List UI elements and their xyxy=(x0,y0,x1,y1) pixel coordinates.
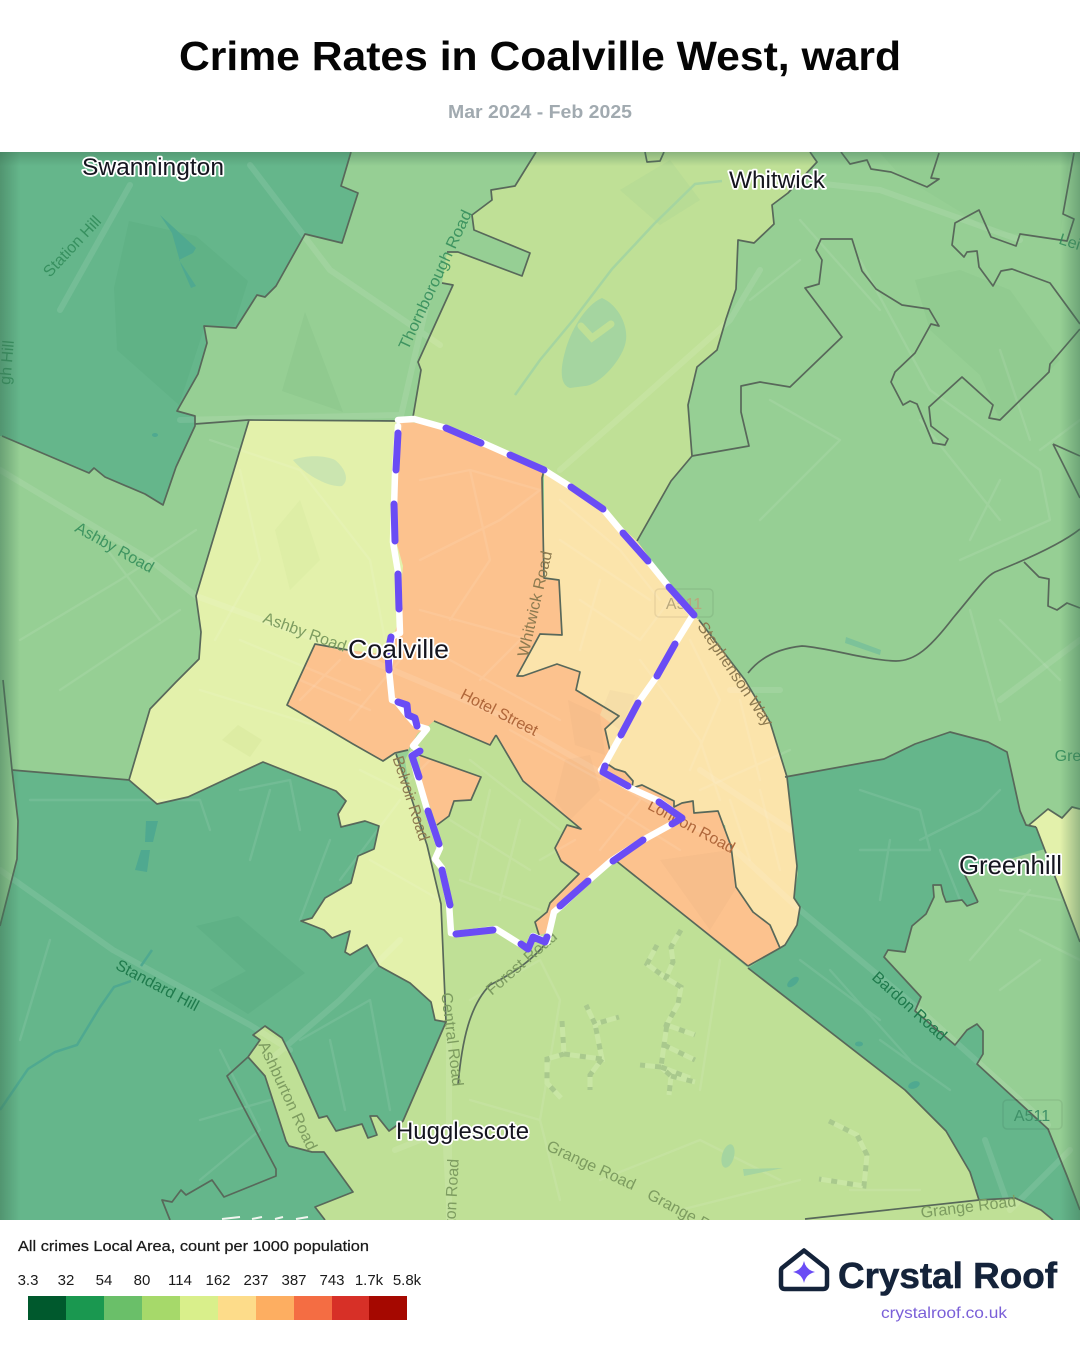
area: pale orange east ward xyxy=(517,470,800,948)
place labels xyxy=(82,154,1062,1145)
place labels: Whitwick xyxy=(729,167,826,194)
legend values xyxy=(18,1272,422,1289)
place labels: Greenhill xyxy=(959,850,1062,880)
legend values: 1.7k xyxy=(355,1272,384,1289)
road labels: Hotel Street xyxy=(458,686,541,740)
area: south-west dark green xyxy=(0,762,446,1220)
road labels: Belvoir Road xyxy=(389,754,432,843)
website link text: crystalroof.co.uk xyxy=(881,1305,1008,1322)
area: north light green xyxy=(398,152,817,541)
road shields A511: A511 xyxy=(1014,1108,1050,1125)
road labels: Ashburton Road xyxy=(254,1039,320,1153)
road labels: Forest Road xyxy=(483,928,561,999)
road labels: Stephenson Way xyxy=(694,619,776,730)
area: orange main ward xyxy=(287,420,780,966)
road labels: Station Hill xyxy=(40,213,105,281)
boundary lines xyxy=(0,152,1080,1220)
road labels: Hamilton Road xyxy=(440,1158,463,1265)
road labels: Grange Road xyxy=(920,1193,1017,1222)
dashed footpaths south xyxy=(547,930,867,1186)
place labels: Swannington xyxy=(82,154,224,181)
area: south light green xyxy=(248,721,1053,1220)
place labels: Coalville xyxy=(348,634,449,664)
logo: Crystal Roof xyxy=(781,1250,1058,1322)
area: south-east dark green xyxy=(748,732,1080,1220)
road labels: Ashby Road xyxy=(261,610,348,656)
road labels: Ashby Road xyxy=(72,519,156,577)
road labels: Standard Hill xyxy=(113,957,202,1015)
road labels: London Road xyxy=(645,797,738,857)
legend colour bar xyxy=(28,1296,407,1320)
lakes and ponds xyxy=(0,181,921,1176)
subtitle: date range: Mar 2024 - Feb 2025 xyxy=(448,102,632,122)
place labels: Hugglescote xyxy=(396,1118,529,1145)
legend xyxy=(18,1238,422,1320)
road labels: Grange Road xyxy=(644,1187,737,1247)
road labels xyxy=(0,208,1080,1265)
legend values: 743 xyxy=(319,1272,345,1289)
legend values: 237 xyxy=(243,1272,269,1289)
ward boundary: purple dashes xyxy=(388,428,694,949)
legend values: 80 xyxy=(134,1272,150,1289)
wordmark: Crystal Roof xyxy=(838,1255,1058,1296)
area: north-west dark green xyxy=(0,152,358,505)
legend values: 3.3 xyxy=(18,1272,38,1289)
road shields A511 xyxy=(655,589,1062,1129)
legend title: All crimes Local Area, count per 1000 population xyxy=(18,1238,369,1255)
streets xyxy=(0,165,1080,1220)
title: Crime Rates in Coalville West, ward xyxy=(179,33,901,79)
legend values: 114 xyxy=(168,1272,192,1289)
ward boundary: white line xyxy=(389,419,693,948)
forest and shaded patches xyxy=(114,153,1070,1014)
icon: house with star xyxy=(781,1250,827,1289)
road labels: Central Road xyxy=(437,992,466,1087)
area: orange south triangle xyxy=(419,755,481,825)
road labels: Bardon Road xyxy=(868,969,950,1045)
legend values: 54 xyxy=(96,1272,112,1289)
road shields A511: A511 xyxy=(666,596,702,613)
legend values: 32 xyxy=(58,1272,74,1289)
road labels: Grange Road xyxy=(544,1138,638,1194)
area: east Greenhill yellow patch xyxy=(1029,807,1080,942)
legend values: 162 xyxy=(205,1272,231,1289)
legend values: 5.8k xyxy=(393,1272,422,1289)
area: Ashburton south dark green xyxy=(162,1057,353,1220)
road labels: Whitwick Road xyxy=(515,549,556,659)
legend values: 387 xyxy=(281,1272,307,1289)
footer background xyxy=(0,1220,1080,1350)
area: Coalville west yellow-green xyxy=(129,420,446,1022)
edge shading xyxy=(0,152,1080,1220)
road labels: Thornborough Road xyxy=(396,208,476,353)
